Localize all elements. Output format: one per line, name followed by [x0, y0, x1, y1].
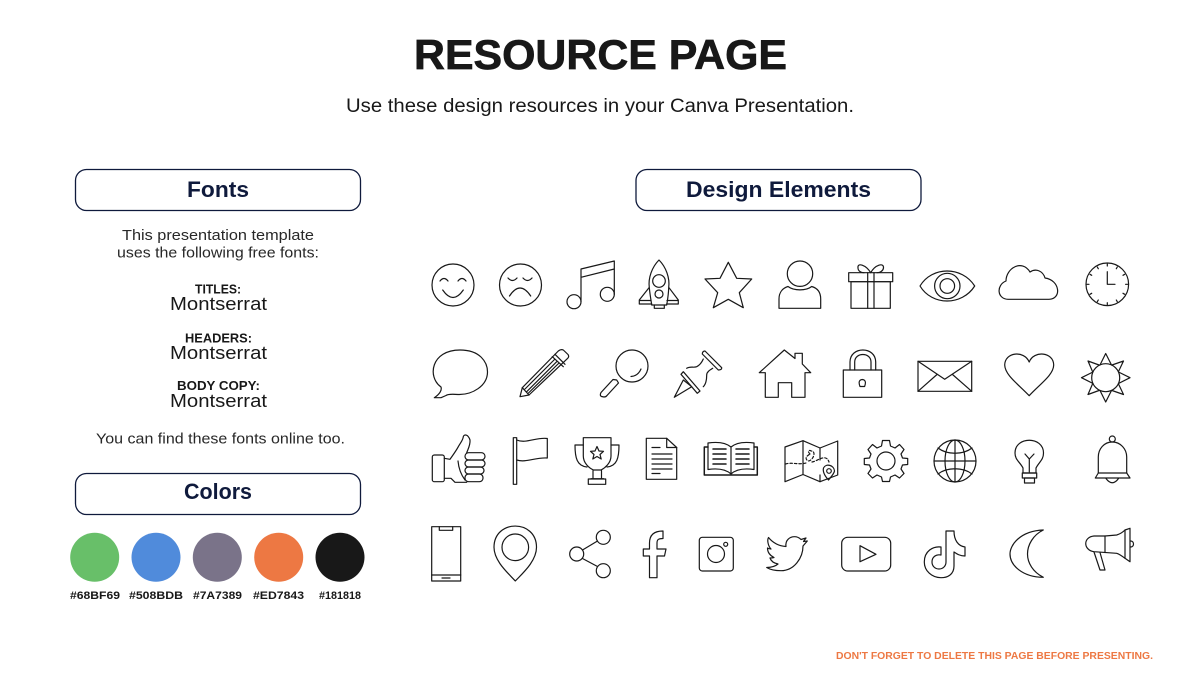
text: fonts intro: uses the following free fonts:	[117, 246, 319, 262]
icon: twitter	[767, 537, 807, 571]
swatch: black	[316, 533, 364, 602]
swatch: orange	[253, 533, 304, 602]
icon: pushpin	[674, 351, 722, 397]
icon: open book	[704, 442, 757, 475]
icon: map pin	[494, 526, 536, 581]
icon: megaphone	[1086, 528, 1134, 570]
panel: fonts	[76, 170, 360, 447]
icon: rocket	[639, 260, 678, 308]
subtitle: Use these design resources in your Canva Presentation.	[346, 96, 854, 117]
icon: eye	[920, 271, 975, 301]
icon: trophy	[575, 438, 619, 484]
text: headers font: HEADERS:	[185, 331, 252, 345]
text: fonts note: You can find these fonts online too.	[96, 431, 345, 447]
icon: light bulb	[1015, 440, 1044, 483]
icon: gift	[849, 265, 893, 308]
swatch: orange: #ED7843	[253, 590, 304, 602]
heading: fonts	[76, 170, 360, 210]
icon: tiktok	[924, 531, 965, 578]
icon: star	[705, 262, 752, 308]
icon: map	[785, 441, 838, 482]
heading: colors: Colors	[184, 479, 252, 504]
icon: document	[646, 438, 677, 479]
icon: thumbs up	[432, 435, 485, 482]
text: body copy font: BODY COPY:	[177, 379, 260, 393]
icon: gear	[864, 440, 908, 482]
icon: bell	[1095, 436, 1130, 483]
icon: share	[570, 530, 610, 578]
icon: globe	[934, 440, 976, 482]
text: fonts intro	[117, 228, 319, 262]
text: fonts intro: This presentation template	[122, 228, 314, 244]
panel: colors	[70, 474, 364, 602]
icon: speech bubble	[433, 350, 488, 398]
heading: design elements	[636, 170, 921, 210]
text: titles font	[170, 282, 267, 314]
text: titles font: TITLES:	[195, 282, 241, 296]
icon: person	[779, 261, 821, 308]
heading: fonts: Fonts	[187, 177, 249, 202]
icon: sad face	[500, 264, 542, 306]
icon: padlock	[843, 350, 882, 397]
icon: house	[759, 350, 811, 397]
icon: youtube	[842, 537, 891, 571]
heading: colors	[76, 474, 360, 514]
swatch: green	[70, 533, 120, 602]
icon: clock	[1086, 263, 1129, 306]
footer note: DON'T FORGET TO DELETE THIS PAGE BEFORE PRESENTING.	[836, 650, 1153, 662]
icon: music note	[567, 261, 614, 309]
icon: sun	[1082, 354, 1130, 402]
swatch: green: #68BF69	[70, 590, 120, 602]
text: headers font	[170, 331, 267, 363]
heading: design elements: Design Elements	[686, 177, 871, 202]
icon: heart	[1005, 354, 1054, 396]
swatch: purple grey	[193, 533, 242, 602]
icon: facebook	[643, 531, 666, 578]
icon: pencil	[520, 350, 569, 397]
swatch: black: #181818	[319, 590, 361, 602]
icon: phone	[432, 527, 461, 581]
icon: smile	[432, 264, 474, 306]
icon: flag	[513, 438, 547, 484]
swatch: blue	[129, 533, 183, 602]
icon: instagram	[699, 537, 733, 571]
text: body copy font	[170, 379, 267, 411]
panel: design element icons	[432, 260, 1134, 581]
icon: magnifier	[600, 350, 648, 397]
text: body copy font: Montserrat	[170, 391, 267, 411]
swatch: blue: #508BDB	[129, 590, 183, 602]
text: titles font: Montserrat	[170, 294, 267, 314]
icon: moon	[1010, 530, 1043, 577]
swatch: purple grey: #7A7389	[193, 590, 242, 602]
icon: cloud	[999, 266, 1058, 299]
title: RESOURCE PAGE	[414, 31, 787, 78]
text: headers font: Montserrat	[170, 343, 267, 363]
icon: envelope	[918, 361, 972, 391]
